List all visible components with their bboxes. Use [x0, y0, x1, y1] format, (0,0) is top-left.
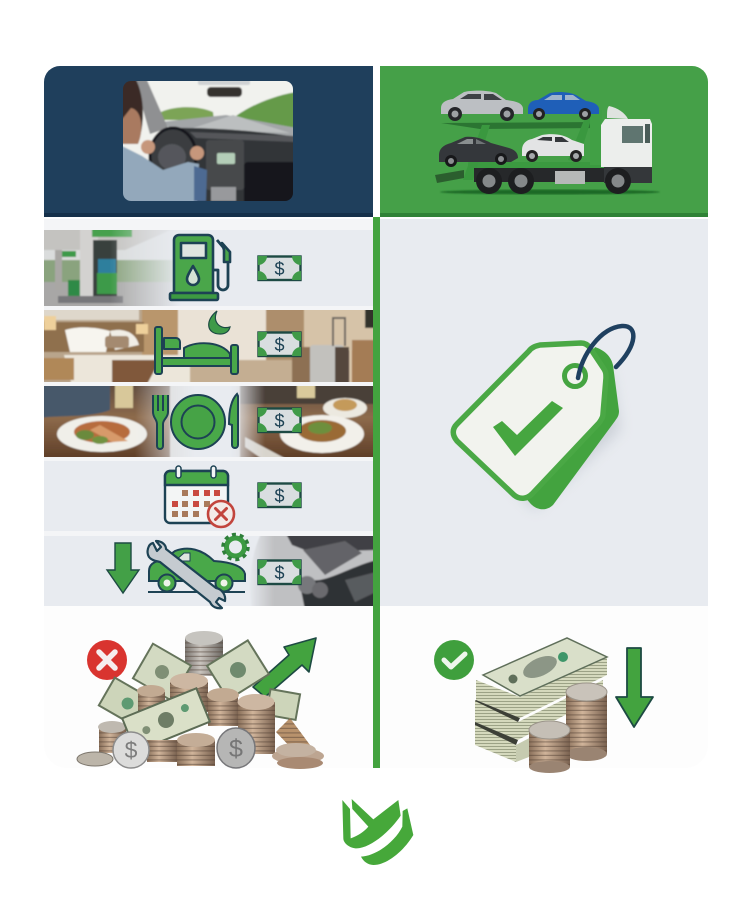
icon: car with wrench and gear	[148, 534, 248, 608]
middle cash block	[475, 680, 603, 745]
icon: price tag with check	[453, 326, 633, 510]
photo: hotel room	[44, 310, 373, 382]
silver SUV	[441, 91, 523, 121]
dark car	[439, 137, 518, 167]
panel: driving header	[44, 66, 373, 217]
icon: down arrow	[107, 543, 139, 593]
coin stack	[566, 683, 607, 761]
icon: moon	[209, 311, 230, 334]
icon: rising arrow	[253, 638, 316, 697]
row: hotel	[44, 310, 373, 382]
bill	[122, 688, 210, 752]
coin: $	[125, 737, 138, 763]
icon: dollar bill: $	[274, 486, 285, 506]
truck cab	[607, 106, 628, 119]
icon: falling arrow	[616, 648, 653, 727]
bottom cash block	[475, 722, 560, 762]
bill	[207, 640, 269, 700]
row: fuel	[44, 230, 373, 306]
top cash block	[475, 638, 607, 722]
icon: fuel pump	[170, 235, 230, 300]
icon: plate	[171, 395, 225, 449]
icon: dollar bill: $	[274, 563, 285, 583]
comparison table panel	[44, 217, 708, 768]
icon: bed	[155, 327, 238, 374]
coin	[113, 732, 149, 768]
section: shipping total cost	[434, 638, 653, 773]
photo: driver at the wheel	[120, 78, 296, 204]
coin: $	[229, 735, 243, 763]
photo: restaurant meals	[44, 386, 373, 457]
bill	[99, 678, 151, 726]
icon: dollar bill	[258, 256, 301, 280]
photo: car engine	[253, 536, 373, 606]
row: meals	[44, 386, 373, 457]
icon: dollar bill	[258, 408, 301, 432]
bill	[133, 644, 191, 700]
row: time off	[44, 461, 373, 531]
white car	[522, 134, 584, 162]
icon: dollar bill: $	[274, 335, 285, 355]
bill	[266, 689, 300, 720]
icon: knife	[229, 394, 238, 448]
centre divider	[373, 217, 380, 768]
icon: green check badge	[434, 640, 474, 680]
icon: dollar bill	[258, 560, 301, 584]
illustration: neat stack of cash and coins	[475, 638, 607, 773]
logo	[342, 799, 413, 865]
icon: fork	[153, 395, 168, 449]
icon: calendar with cross	[165, 466, 234, 527]
icon: red cross badge	[87, 640, 127, 680]
section: driving total cost	[77, 631, 324, 769]
photo: gas station	[44, 230, 174, 306]
icon: dollar bill	[258, 483, 301, 507]
icon: dollar bill: $	[274, 411, 285, 431]
coin	[217, 728, 255, 768]
illustration: pile of coins and bills	[77, 631, 324, 769]
icon: dollar bill: $	[274, 259, 285, 279]
blue car	[528, 92, 599, 120]
panel: shipping header	[380, 66, 708, 217]
icon: dollar bill	[258, 332, 301, 356]
row: wear and maintenance	[44, 532, 376, 610]
illustration: car carrier truck	[435, 91, 660, 194]
coin stack	[529, 721, 570, 773]
